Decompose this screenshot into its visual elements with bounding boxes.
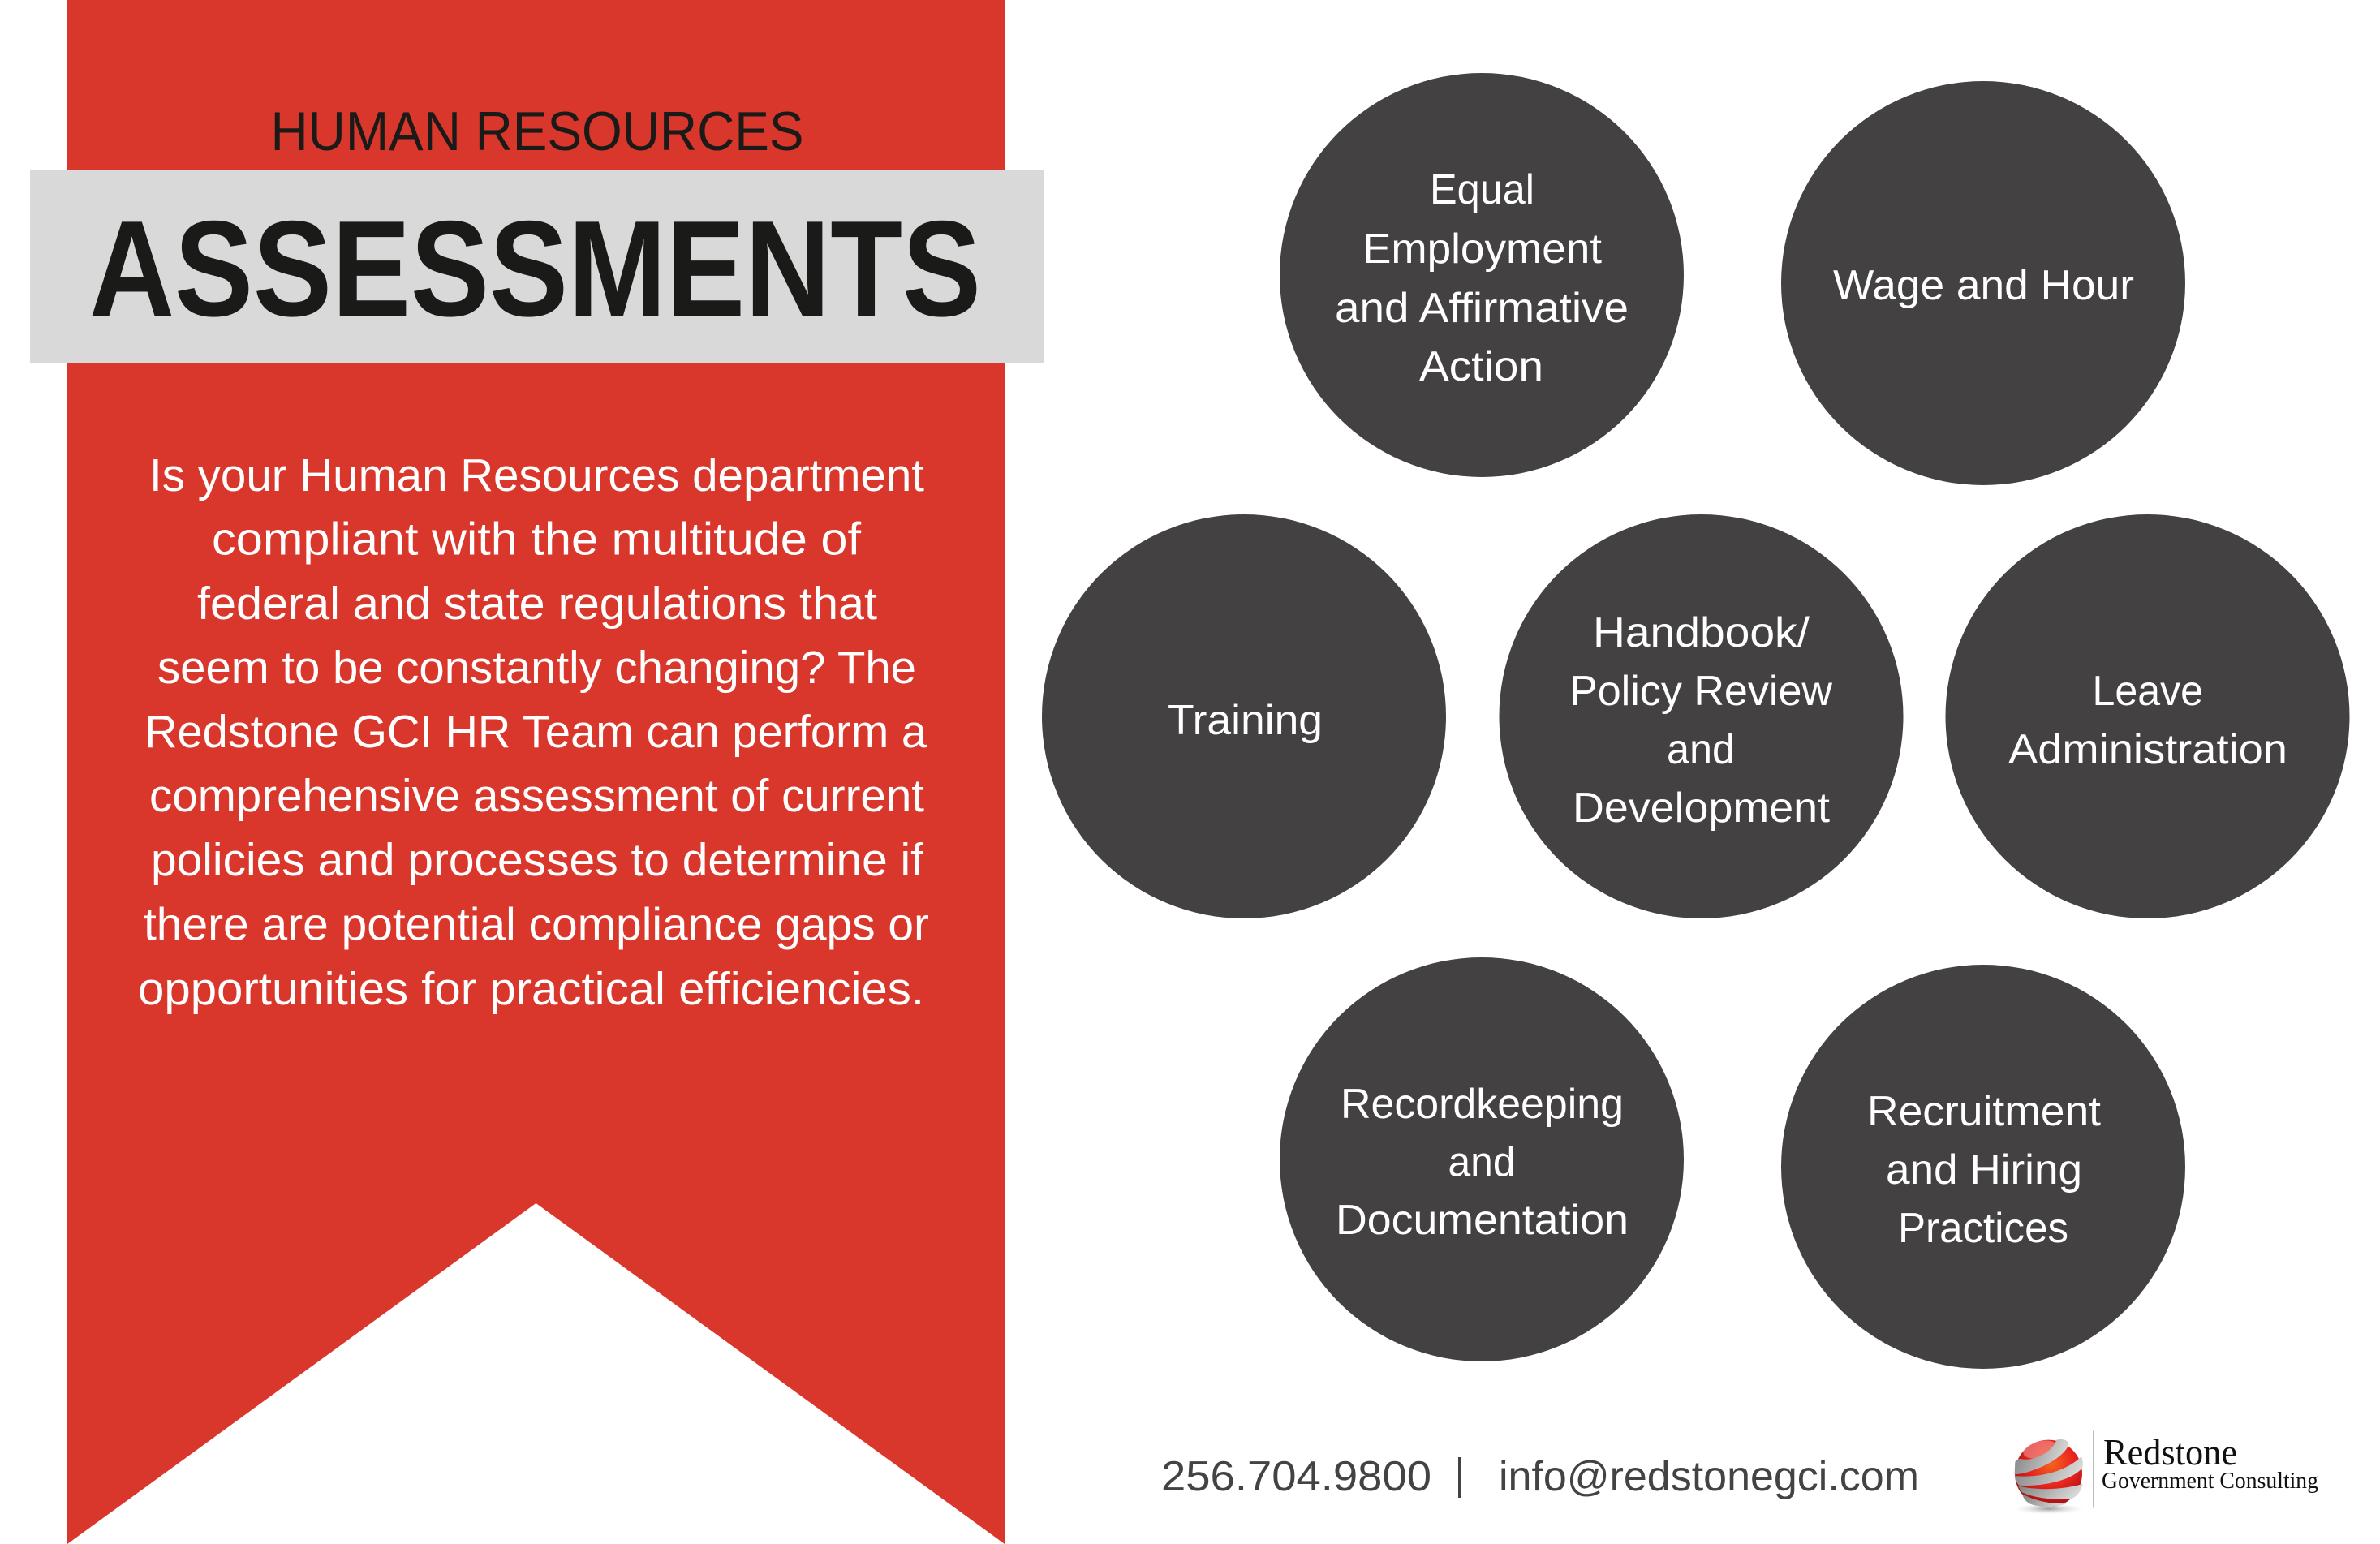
title: assessments: ASSESSMENTS [89, 192, 981, 345]
text block: introduction: compliant with the multitude of [212, 513, 861, 565]
circle: recruitment and hiring practices: and Hiring [1886, 1146, 2082, 1193]
circle: equal employment and affirmative action [1280, 73, 1684, 477]
text block: introduction: Redstone GCI HR Team can perform a [144, 706, 927, 758]
title banner [30, 170, 1044, 363]
text block: introduction: there are potential compliance gaps or [144, 899, 929, 951]
circle: wage and hour [1781, 81, 2185, 485]
circle: equal employment and affirmative action: and Affirmative [1335, 285, 1629, 332]
circle: handbook policy review and development: and [1667, 726, 1735, 773]
circle: recordkeeping and documentation: Recordkeeping [1341, 1081, 1624, 1128]
icon: striped sphere [2010, 1438, 2087, 1515]
circle: recordkeeping and documentation: and [1448, 1139, 1516, 1186]
logo wordmark [2102, 1432, 2318, 1494]
circle: handbook policy review and development [1500, 514, 1904, 918]
logo: redstone government consulting [2010, 1431, 2318, 1515]
text block: introduction [138, 449, 929, 1015]
contact line [1161, 1453, 1919, 1500]
circle: training [1042, 514, 1446, 918]
circle: handbook policy review and development: Policy Review [1569, 668, 1832, 715]
logo wordmark: Government Consulting [2102, 1469, 2318, 1494]
text block: introduction: opportunities for practical efficiencies. [138, 963, 924, 1015]
contact line: 256.704.9800 [1161, 1453, 1431, 1500]
heading: human resources: HUMAN RESOURCES [271, 101, 803, 162]
circle: equal employment and affirmative action: Employment [1362, 226, 1603, 273]
circle: leave administration: Administration [2008, 726, 2287, 773]
circle: recruitment and hiring practices [1781, 965, 2185, 1369]
contact line: info@redstonegci.com [1499, 1453, 1919, 1500]
circle: recordkeeping and documentation [1280, 957, 1684, 1361]
circle: equal employment and affirmative action: Equal [1430, 166, 1534, 213]
circle: leave administration [1946, 514, 2350, 918]
circle: recruitment and hiring practices: Recruitment [1867, 1088, 2102, 1135]
panel: red ribbon [67, 0, 1005, 1544]
circle: leave administration: Leave [2092, 668, 2203, 715]
circle: handbook policy review and development: Handbook/ [1593, 609, 1810, 656]
circle: recruitment and hiring practices: Practices [1898, 1205, 2068, 1252]
logo wordmark: Redstone [2103, 1432, 2237, 1473]
circle: training: Training [1168, 697, 1323, 744]
text block: introduction: policies and processes to determine if [151, 834, 923, 886]
circle: wage and hour: Wage and Hour [1833, 262, 2134, 309]
circle: equal employment and affirmative action: Action [1419, 343, 1543, 390]
text block: introduction: seem to be constantly changing? The [157, 642, 916, 694]
circle: recordkeeping and documentation: Documentation [1336, 1197, 1629, 1244]
circle: handbook policy review and development: Development [1573, 785, 1831, 832]
text block: introduction: federal and state regulations that [197, 578, 877, 630]
text block: introduction: comprehensive assessment of current [149, 770, 924, 822]
text block: introduction: Is your Human Resources department [149, 449, 924, 501]
